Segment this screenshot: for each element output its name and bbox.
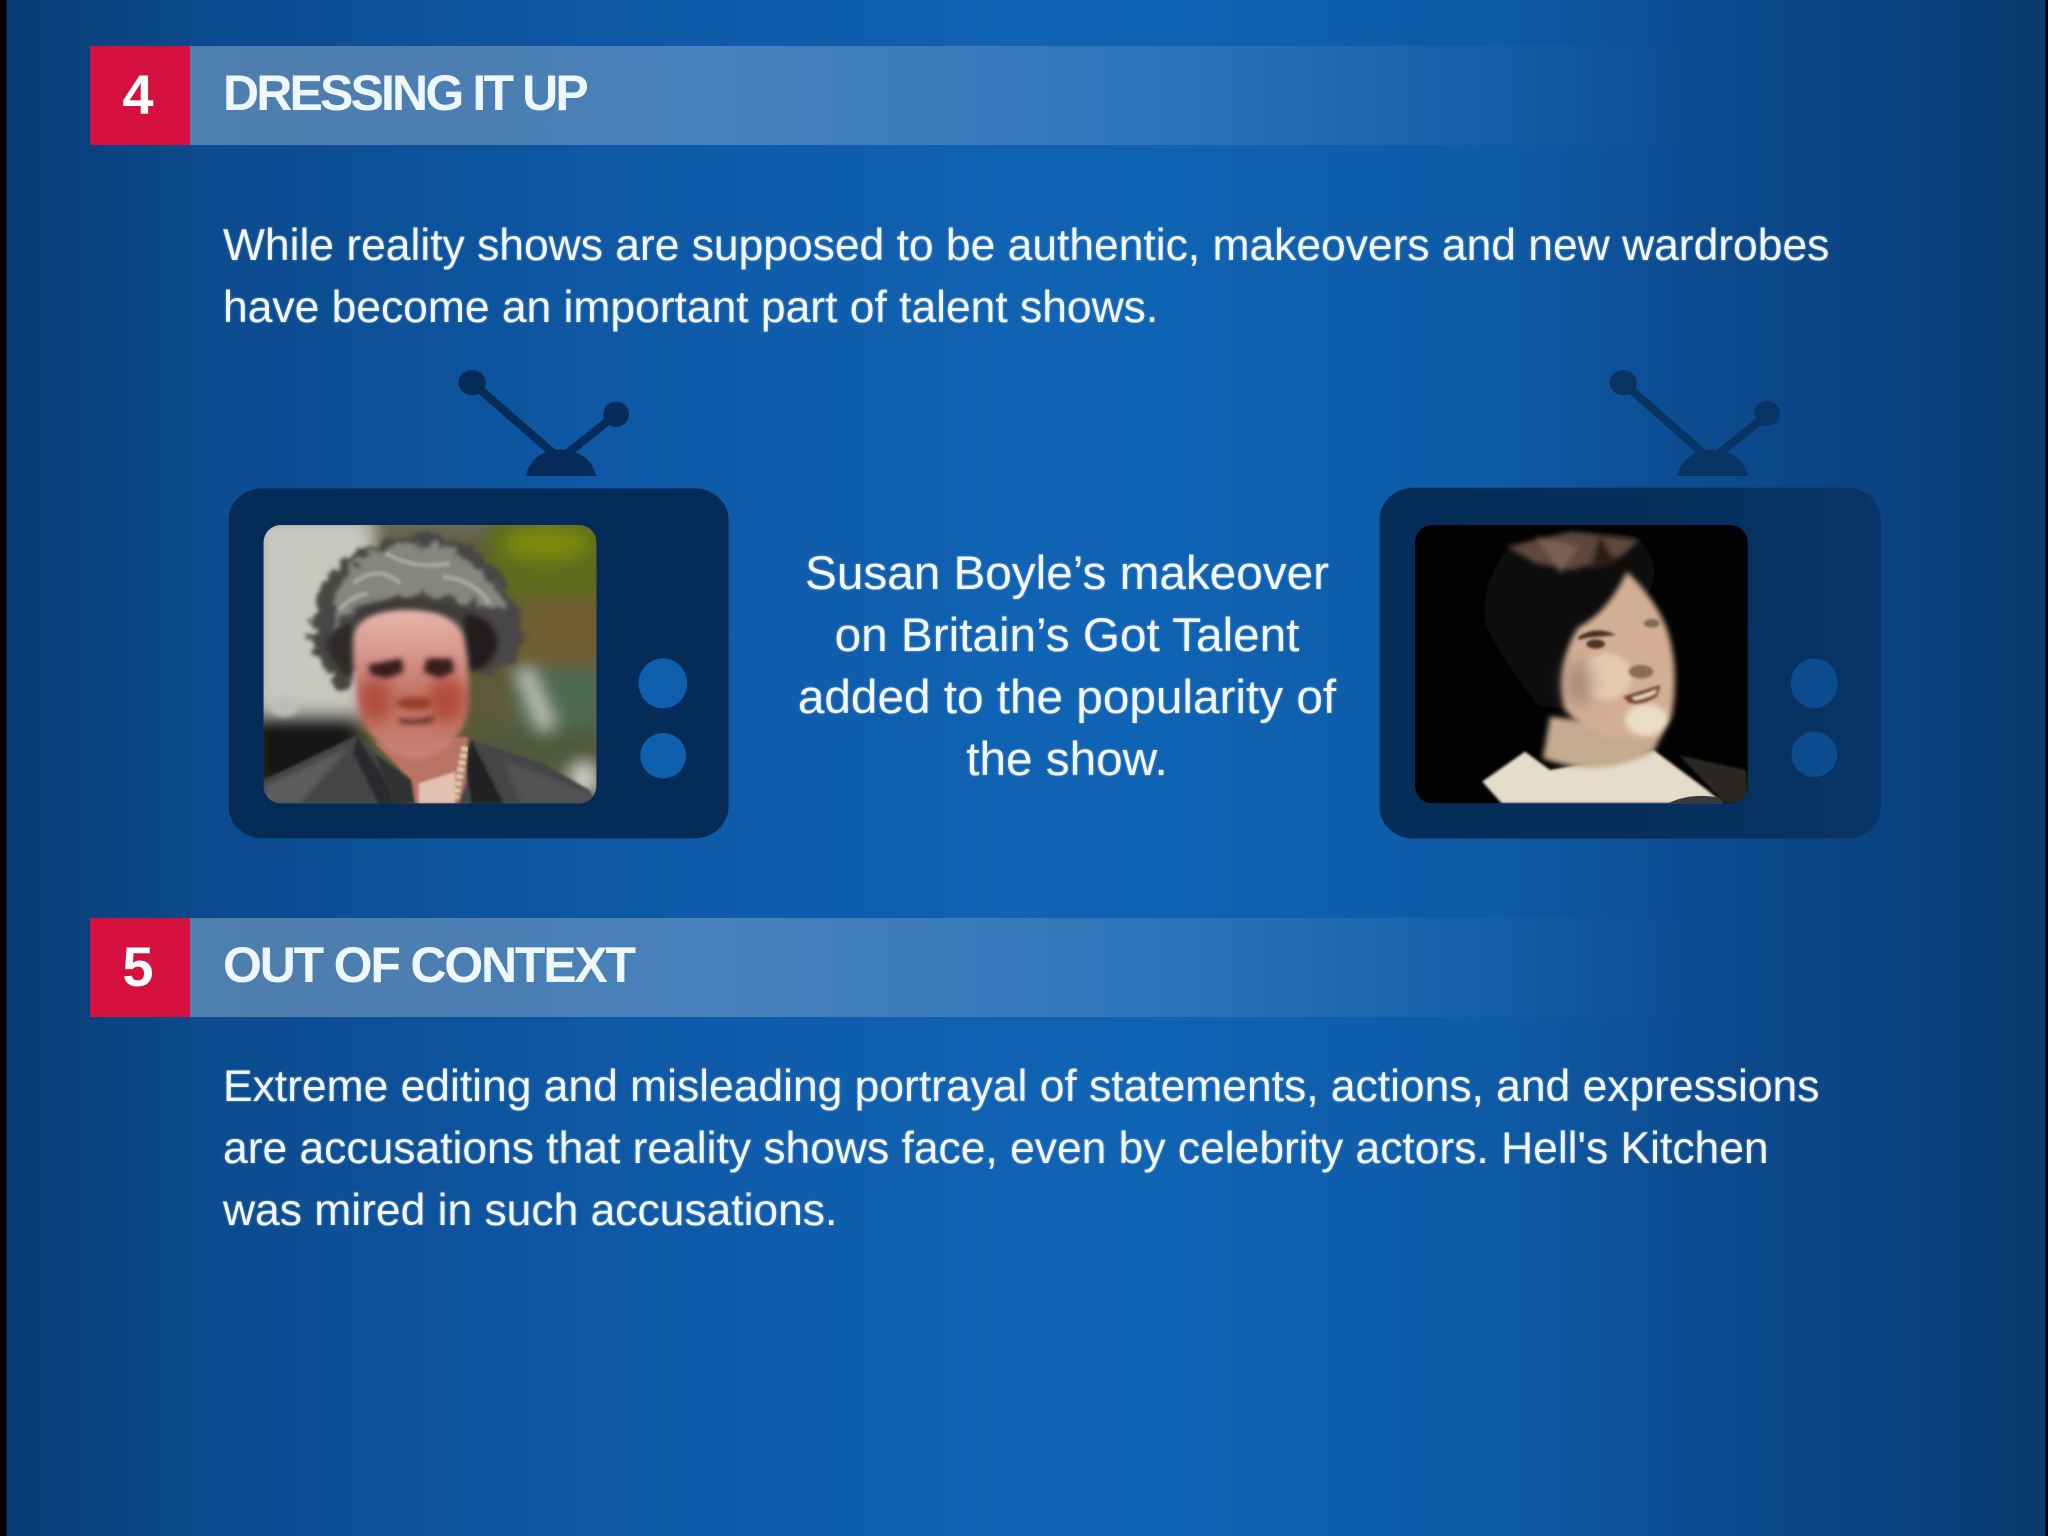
face	[1562, 572, 1675, 740]
text block: section 5 body	[222, 1062, 1820, 1235]
hair	[1484, 532, 1655, 708]
antenna	[1610, 370, 1780, 476]
hair	[310, 534, 524, 690]
photo: Susan Boyle after makeover	[1415, 525, 1748, 803]
neck	[375, 737, 468, 803]
knobs	[639, 658, 687, 778]
text block: section 5 body: Extreme editing and misleading portrayal of statements, actions, and expressions	[223, 1062, 1819, 1111]
section 5 heading band	[90, 918, 1790, 1017]
text block: section 5 body: are accusations that reality shows face, even by celebrity actors. Hell's Kitchen	[223, 1124, 1769, 1173]
photo: Susan Boyle before makeover	[254, 517, 607, 803]
heading: dressing it up: DRESSING IT UP	[223, 65, 586, 121]
section 4 heading band	[90, 46, 1790, 145]
number badge 4	[90, 46, 190, 145]
text block: makeover caption	[798, 547, 1338, 786]
heading: out of context: OUT OF CONTEXT	[223, 937, 634, 993]
dress	[1482, 750, 1723, 803]
knobs	[1791, 659, 1838, 777]
text block: section 4 intro: have become an important part of talent shows.	[223, 283, 1158, 332]
face	[353, 610, 469, 759]
text block: section 4 intro: While reality shows are supposed to be authentic, makeovers and new wardrobes	[223, 221, 1829, 270]
icon: right television with after photo	[1380, 370, 1881, 839]
jacket	[264, 735, 596, 803]
number badge 5: 5	[122, 935, 154, 998]
icon: left television with before photo	[228, 370, 729, 838]
infographic page: added to the popularity of	[798, 671, 1336, 724]
facial features	[1579, 619, 1661, 704]
text block: section 5 body: was mired in such accusations.	[223, 1186, 837, 1235]
number badge 5	[90, 918, 190, 1017]
number badge 4: 4	[122, 63, 154, 126]
antenna	[459, 370, 629, 476]
infographic page: Susan Boyle’s makeover	[805, 547, 1329, 600]
television body	[1380, 488, 1881, 839]
infographic page: the show.	[966, 733, 1168, 786]
television body	[229, 488, 729, 838]
neck	[1543, 717, 1664, 768]
infographic page: on Britain’s Got Talent	[835, 609, 1299, 662]
text block: section 4 intro	[222, 221, 1829, 333]
